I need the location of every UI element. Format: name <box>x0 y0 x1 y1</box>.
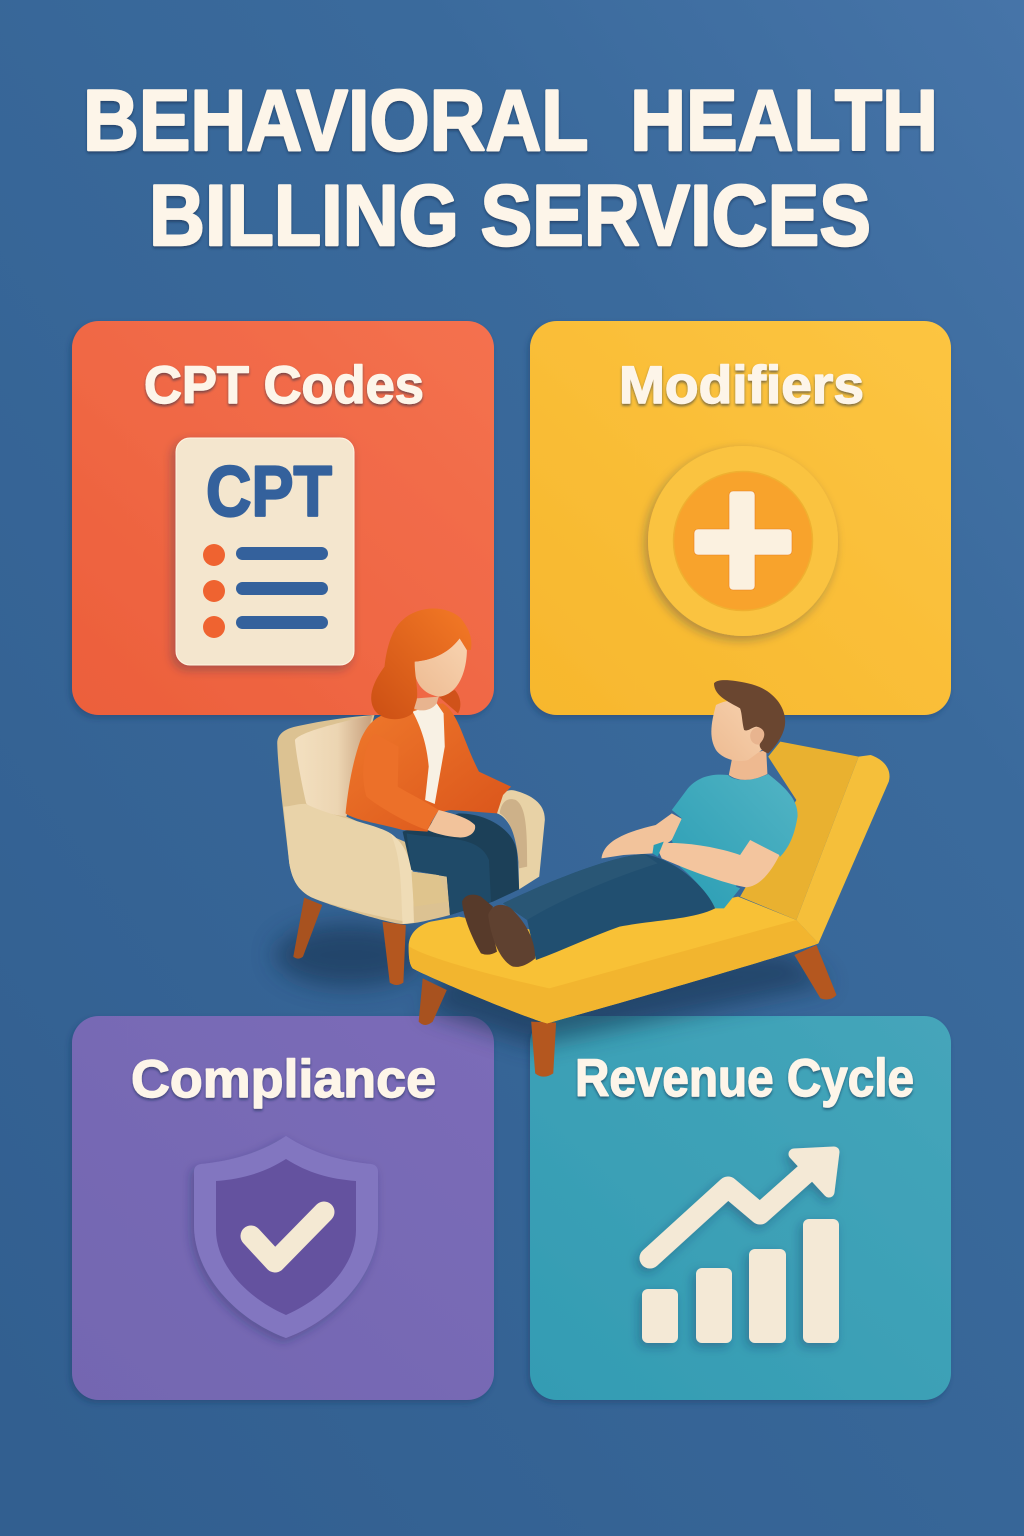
client figure <box>462 680 798 967</box>
title line 1: BEHAVIORAL HEALTH <box>83 73 938 169</box>
panel: CPT Codes <box>72 321 494 715</box>
panel: Compliance <box>72 1016 494 1400</box>
panel: Modifiers <box>530 321 951 715</box>
icon: CPT document: CPT <box>206 453 332 532</box>
armchair <box>277 715 545 985</box>
illustration: therapy scene <box>277 609 890 1077</box>
heading: CPT Codes <box>144 356 424 415</box>
heading: Compliance <box>131 1050 436 1109</box>
icon: plus badge <box>648 446 838 636</box>
heading: Modifiers <box>619 356 864 415</box>
icon: growth chart <box>642 1152 839 1343</box>
therapist figure <box>346 609 519 915</box>
card background <box>72 1016 494 1400</box>
chaise lounge <box>409 742 890 1077</box>
card background <box>530 321 951 715</box>
heading: Revenue Cycle <box>575 1049 914 1108</box>
panel: Revenue Cycle <box>530 1016 951 1400</box>
floor shadows <box>275 923 830 1045</box>
icon: shield check <box>194 1136 378 1338</box>
card background <box>72 321 494 715</box>
icon: CPT document <box>176 438 354 665</box>
card background <box>530 1016 951 1400</box>
title <box>83 73 938 264</box>
title line 2: BILLING SERVICES <box>149 168 871 264</box>
